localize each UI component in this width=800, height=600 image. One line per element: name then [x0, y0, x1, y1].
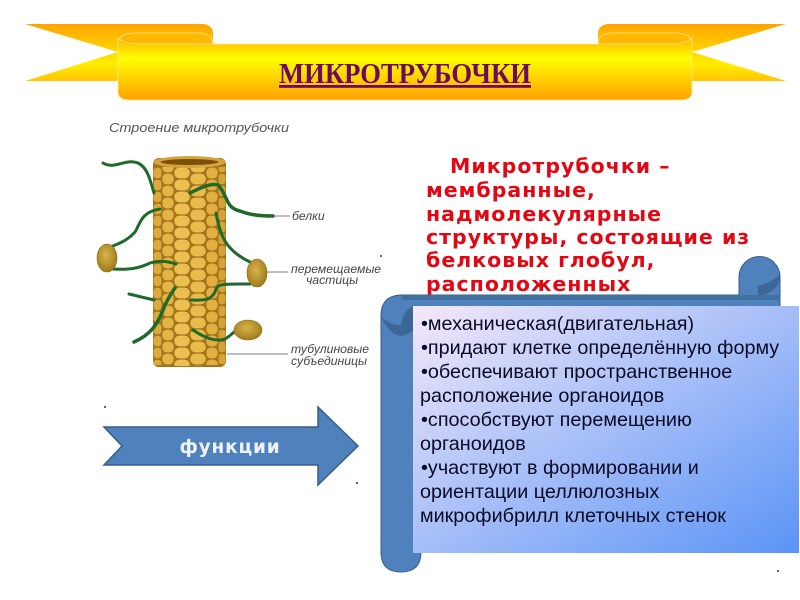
leader lines [227, 216, 290, 354]
red definition text: Микротрубочки – [450, 154, 670, 178]
left ribbon fold [118, 33, 213, 44]
transported particles [97, 244, 267, 340]
scroll body [381, 256, 780, 572]
diagram labels [291, 209, 381, 368]
function list text: •обеспечивают пространственное [421, 361, 732, 383]
red definition text: структуры, состоящие из [426, 225, 750, 249]
green protein strands [103, 162, 273, 342]
ribbon right tail [598, 24, 786, 81]
function list text: •способствуют перемещению [421, 409, 692, 431]
stray dots [104, 255, 779, 572]
function list text [420, 313, 779, 527]
diagram labels: частицы [306, 273, 358, 287]
red definition text: надмолекулярные [426, 202, 662, 226]
title ribbon banner [25, 24, 786, 100]
scroll left fold [381, 306, 413, 336]
ribbon main band [118, 38, 692, 100]
function list text: ориентации целлюлозных [420, 481, 659, 503]
red definition text: белковых глобул, [426, 248, 655, 272]
arrow: functions [104, 407, 358, 485]
red definition text: мембранные, [426, 178, 596, 202]
microtubule cylinder [153, 156, 226, 367]
function list text: микрофибрилл клеточных стенок [420, 505, 726, 527]
diagram labels: белки [292, 209, 325, 223]
diagram labels: тубулиновые [291, 342, 369, 356]
function list text: органоидов [420, 433, 526, 455]
gradient text panel [413, 306, 799, 553]
title: МИКРОТРУБОЧКИ [279, 59, 531, 90]
arrow: functions: функции [180, 437, 280, 458]
function list text: •механическая(двигательная) [421, 313, 694, 335]
function list text: •участвуют в формировании и [421, 457, 699, 479]
diagram: microtubule structure [97, 120, 381, 368]
diagram heading: Строение микротрубочки [109, 120, 289, 135]
ribbon left tail [25, 24, 213, 81]
function list text: •придают клетке определённую форму [421, 337, 779, 359]
diagram labels: субъединицы [291, 354, 367, 368]
scroll top band shading [402, 295, 780, 300]
diagram labels: перемещаемые [291, 262, 381, 276]
red definition text: расположенных [426, 272, 631, 296]
right ribbon fold [598, 33, 692, 44]
scroll panel: functions list [381, 256, 799, 572]
scroll top right fold [758, 275, 780, 296]
function list text: расположение органоидов [420, 385, 664, 407]
red definition text [426, 154, 750, 296]
